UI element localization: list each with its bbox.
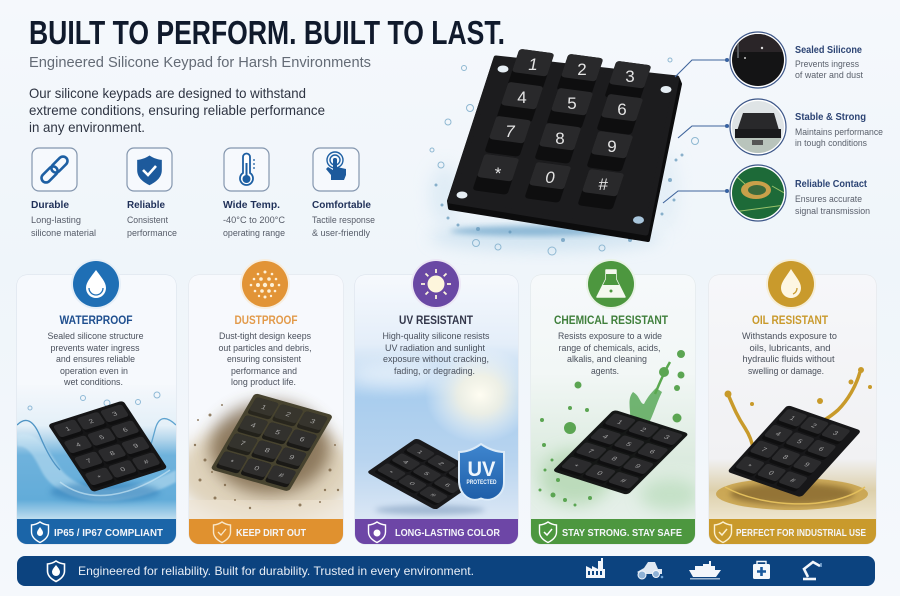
badge text: LONG-LASTING COLOR [395,528,501,539]
heading: CHEMICAL RESISTANT [554,315,668,327]
keypad: 6 [648,448,657,455]
keypad: 1 [415,450,424,455]
keypad: 5 [274,428,282,436]
callout: reliable contact [730,165,870,221]
subtitle: Engineered Silicone Keypad for Harsh Environments [29,55,371,71]
description: Maintains performance [795,127,883,137]
intro text: in any environment. [29,119,145,135]
badge text: PERFECT FOR INDUSTRIAL USE [736,528,866,539]
icon: badge shield [714,522,732,542]
keys: 0 [545,168,555,187]
keypad: 1 [64,426,72,433]
keypad: 7 [759,447,768,453]
badge band [355,519,518,544]
feature: reliable [127,148,177,238]
description: performance and [231,366,297,376]
keys: 7 [505,122,515,141]
description: Prevents ingress [795,59,859,69]
keypad: 9 [132,443,140,450]
keys: 2 [577,60,587,79]
image: keypad covered in dust [189,275,343,519]
badge band [189,519,343,544]
description: UV radiation and sunlight [385,343,485,353]
keypad: 6 [298,435,306,443]
description: alkalis, and cleaning [567,354,647,364]
keypad: 0 [253,464,261,472]
label: Wide Temp. [223,199,280,211]
description: exposure without cracking, [383,354,489,364]
description [742,331,837,376]
keys: 8 [555,129,565,148]
keypad: 5 [624,440,634,448]
keypad: 6 [443,483,452,488]
icon: ship [689,561,721,580]
icon: badge shield [32,522,48,542]
heading: UV RESISTANT [399,315,473,327]
description: range of chemicals, acids, [558,343,660,353]
keypad: 7 [586,447,596,455]
description [48,331,144,387]
panel: oil resistant [709,259,876,544]
keypad: 3 [111,411,119,418]
footer banner [17,556,875,586]
description: & user-friendly [312,228,370,238]
keypad: 4 [601,433,610,440]
keypad: 9 [802,462,811,468]
description: long product life. [231,377,296,387]
icon: sun [411,259,461,309]
feature: wide temperature [223,148,286,238]
keypad: 7 [85,458,93,465]
tagline: Engineered for reliability. Built for durability. Trusted in every environment. [78,564,474,578]
keypad: 3 [457,473,466,478]
keypad [368,439,461,509]
keypad: 2 [284,410,292,418]
keypad [210,393,333,492]
keys: 5 [567,94,577,113]
keypad [48,400,168,492]
main keypad product image [449,49,680,240]
description [795,59,863,80]
image: keypad with chemical splash [531,275,700,520]
description: of water and dust [795,70,863,80]
keypad: 8 [781,455,789,461]
panel: waterproof [17,259,176,544]
keys: 6 [617,100,627,119]
label: Comfortable [312,199,371,211]
image: keypad under the sun [355,275,518,519]
keys: * [495,164,502,183]
keypad: 5 [98,435,106,441]
icon: thermometer [224,148,269,191]
icon: dust particles [240,259,290,309]
keypad: # [619,477,628,484]
keypad: * [228,458,235,466]
panel: chemical resistant [531,259,700,544]
icon: chain link [32,148,77,191]
icon: badge shield [540,522,556,542]
keypad: 4 [249,421,257,429]
inset photo: sealed edge [730,32,786,88]
icon: oil drop [766,259,816,309]
heading: DUSTPROOF [234,315,298,327]
keypad: 8 [610,455,619,462]
image: keypad splashing in water [17,275,176,520]
description [382,331,490,376]
description: Resists exposure to a wide [558,331,662,341]
water splash under main keypad [429,58,698,255]
keypad: # [428,493,437,498]
keys [472,49,651,210]
callout: sealed silicone [730,32,863,88]
description: signal transmission [795,206,870,216]
uv protected shield: UV [468,458,496,481]
keypad: 2 [88,419,96,425]
description: Dust-tight design keeps [219,331,311,341]
heading: Sealed Silicone [795,45,862,56]
badge text: STAY STRONG. STAY SAFE [562,528,682,539]
keypad: 0 [767,470,775,477]
keypad: 6 [817,446,825,453]
description: out particles and debris, [218,343,312,353]
description: hydraulic fluids without [742,354,835,364]
keypad: * [386,470,394,475]
title: BUILT TO PERFORM. BUILT TO LAST. [29,15,505,52]
description: swelling or damage. [748,366,824,376]
keypad: 0 [119,467,127,473]
keypad: * [745,464,753,470]
inset photo: circuit board contact [730,165,786,221]
description: Consistent [127,215,168,225]
keypad: * [97,475,103,481]
description [558,331,662,376]
description: oils, lubricants, and [750,343,830,353]
keypad: # [277,471,286,480]
keypad: 7 [239,439,247,447]
description: operating range [223,228,285,238]
label: Durable [31,199,69,211]
description [795,127,883,148]
heading: Stable & Strong [795,112,866,123]
description: silicone material [31,228,96,238]
heading: WATERPROOF [60,315,132,327]
icon: tractor [637,562,663,579]
description [31,215,96,238]
icon: water drop [71,259,121,309]
callout connectors [663,58,728,203]
description: operation even in [60,366,128,376]
description: prevents water ingress [50,343,140,353]
inset photo: key cross-section [730,99,786,158]
keypad: 4 [774,431,782,438]
keypad: 4 [401,460,410,465]
intro text: extreme conditions, ensuring reliable performance [29,102,325,118]
icon: medical kit [753,562,770,579]
keypad: 6 [122,427,130,434]
badge text: KEEP DIRT OUT [236,528,306,539]
keypad: 1 [615,418,625,426]
intro text [29,85,325,135]
keypad: * [572,463,580,470]
keys: 1 [528,55,538,74]
badge text: IP65 / IP67 COMPLIANT [54,528,163,539]
keypad base plate [449,60,680,240]
callout: stable and strong [730,99,883,158]
description [795,194,870,216]
description: Sealed silicone structure [48,331,144,341]
intro text: Our silicone keypads are designed to withstand [29,85,306,101]
heading: OIL RESISTANT [752,315,828,327]
keypad: 3 [831,431,839,437]
description [127,215,177,238]
keypad: 9 [288,453,296,461]
description: performance [127,228,177,238]
keypad: 8 [109,451,117,457]
keypad: 5 [795,439,803,445]
keypad: 3 [309,417,317,425]
feature: durable [31,148,96,238]
icon: factory [586,558,605,578]
keypad: 3 [662,433,672,441]
description: ensuring consistent [227,354,301,364]
keypad: 2 [639,426,648,433]
icon: badge shield [368,522,386,542]
badge band [17,519,176,544]
description: and ensures reliable [56,354,135,364]
keypad: 4 [75,442,83,449]
label: Reliable [127,199,165,211]
icon: badge shield [214,522,230,542]
description [223,215,286,238]
keypad: 1 [260,403,268,411]
keypad: # [788,478,796,484]
keypad: 5 [422,471,431,477]
keypad: 0 [595,469,605,477]
icon: touch hand [313,148,359,191]
icon: footer shield [48,561,64,582]
description: Withstands exposure to [742,331,837,341]
mounting holes [456,66,672,224]
keys: 9 [607,137,617,156]
badge band [531,519,695,544]
description: High-quality silicone resists [382,331,490,341]
uv protected shield [459,444,504,500]
image: keypad in oil splash [709,275,876,520]
panel: dustproof [188,259,344,544]
keys: # [598,175,608,194]
keypad: 8 [263,446,271,454]
heading: Reliable Contact [795,179,868,190]
description: fading, or degrading. [394,366,475,376]
description [312,215,375,238]
keypad: 1 [788,416,796,422]
keypad: 2 [436,461,445,467]
keys: 4 [517,88,527,107]
keypad [727,405,861,498]
keypad: 9 [633,462,643,470]
description: Tactile response [312,215,375,225]
description: Long-lasting [31,215,81,225]
description: -40°C to 200°C [223,215,286,225]
description: agents. [591,366,619,376]
keypad: # [143,459,151,466]
panel: uv resistant [354,259,518,544]
icon: robot arm [803,562,821,579]
feature: comfortable [312,148,375,238]
keypad: 2 [809,423,818,429]
description: wet conditions. [63,377,123,387]
badge band [709,519,876,544]
uv protected shield: PROTECTED [466,480,497,486]
description [218,331,312,387]
keypad: 0 [407,481,416,487]
description: in tough conditions [795,138,867,148]
icon: flask [586,259,636,309]
keypad [552,410,689,495]
icon: shield check [127,148,172,191]
description: Ensures accurate [795,194,862,204]
keys: 3 [625,67,635,86]
